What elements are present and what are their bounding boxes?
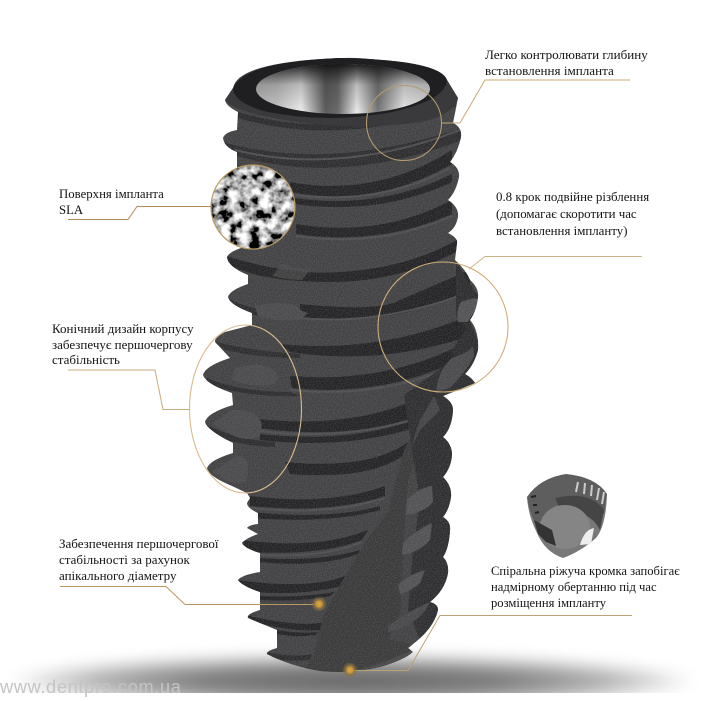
callout: cutting edge: розміщення імпланту — [491, 596, 607, 610]
SEM surface circle — [211, 165, 295, 249]
callout: apical diameter: Забезпечення першочергової — [59, 536, 219, 551]
callout: depth control — [442, 47, 648, 123]
callout: apical diameter — [59, 536, 327, 612]
right teeth — [388, 344, 478, 650]
top rim — [225, 58, 458, 126]
callout: tapered design: Конічний дизайн корпусу — [52, 321, 194, 336]
callout: apical diameter: стабільності за рахунок — [59, 552, 191, 567]
surface texture — [204, 58, 478, 672]
callout: tapered design: стабільність — [52, 352, 120, 367]
spiral cutting head detail — [525, 472, 609, 560]
implant body — [203, 58, 478, 672]
callout: cutting edge: надмірному обертанню під час — [491, 580, 657, 594]
callout: SLA surface: Поверхня імпланта — [59, 187, 164, 201]
callout: tapered design — [52, 321, 194, 410]
callout: apical diameter: апікального діаметру — [59, 568, 177, 583]
tapered body ellipse — [190, 325, 302, 493]
callout: depth control: Легко контролювати глибину — [485, 47, 648, 62]
big circle thread detail — [436, 262, 478, 392]
flute: spiral cutting edge — [306, 440, 414, 672]
bowl — [256, 64, 430, 114]
callout: thread pitch: (допомагає скоротити час — [496, 207, 637, 221]
bottom shading — [358, 651, 412, 670]
shadow beneath implant — [24, 648, 680, 693]
circle callouts — [190, 86, 508, 493]
callout: thread pitch: встановлення імпланту) — [496, 224, 628, 238]
thread circle — [378, 262, 508, 392]
callout: SLA surface: SLA — [59, 203, 84, 217]
callout: SLA surface — [59, 187, 212, 220]
callout: cutting edge: Спіральна ріжуча кромка запобігає — [491, 564, 680, 578]
thread grooves — [205, 100, 470, 661]
thread highlights — [235, 130, 470, 556]
callout: tapered design: забезпечує першочергову — [52, 337, 193, 352]
callout: depth control: встановлення імпланта — [485, 63, 614, 78]
watermark: www.dentpro.com.ua — [0, 677, 182, 697]
left thread lobes — [212, 264, 312, 483]
callout: cutting edge — [342, 564, 680, 678]
depth circle — [366, 86, 442, 160]
callout: thread pitch — [469, 190, 649, 269]
callout: thread pitch: 0.8 крок подвійне різблення — [496, 190, 649, 204]
